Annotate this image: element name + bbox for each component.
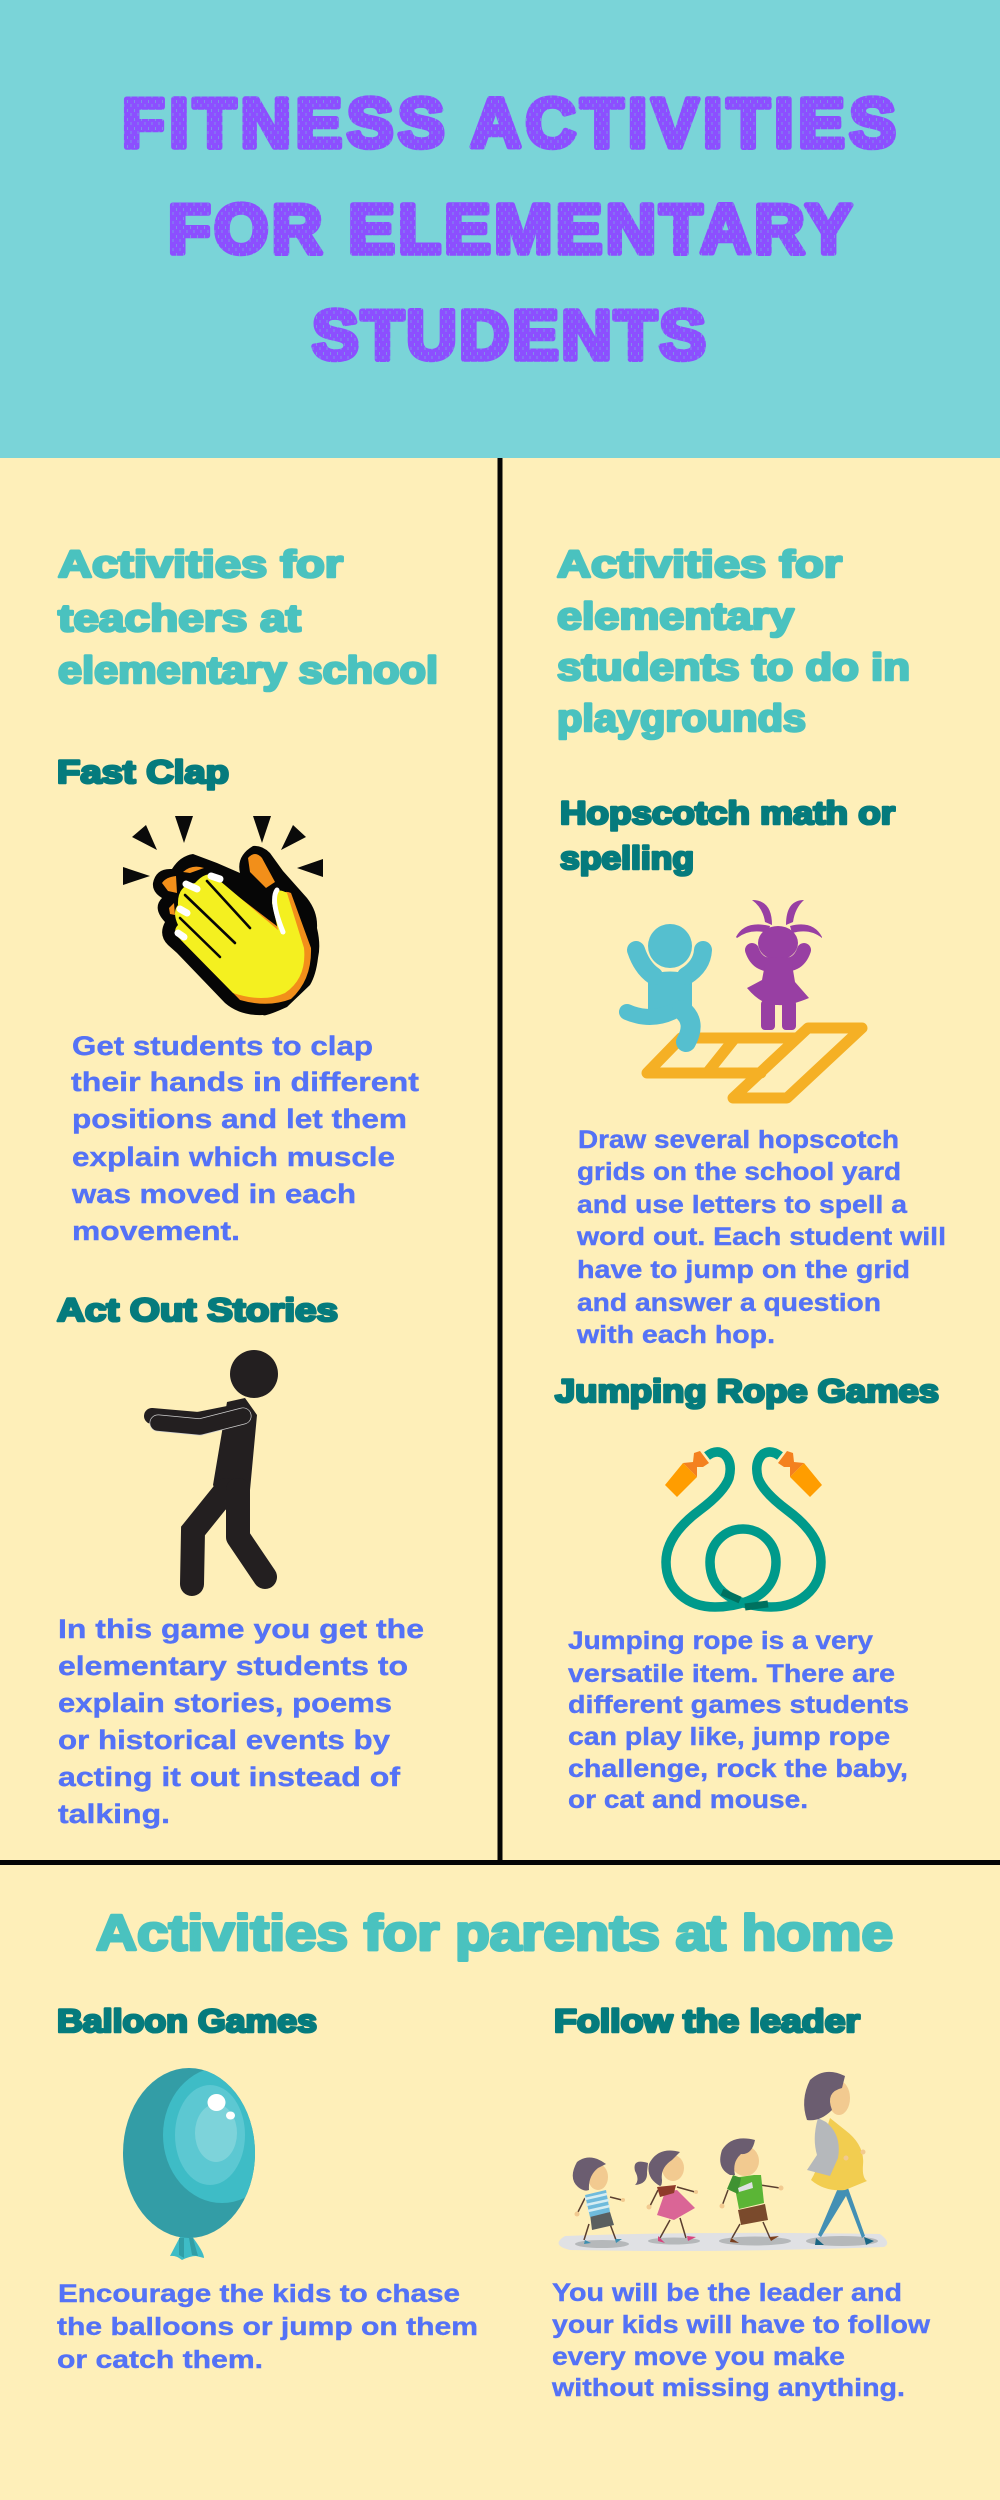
text: Balloon description — [57, 2280, 478, 2374]
text: Jumping Rope description: versatile item. There are — [568, 1660, 895, 1688]
subheading: Fast Clap: Fast Clap — [57, 754, 229, 790]
figure: boy in green shirt — [720, 2138, 784, 2243]
illustration: mother leading children — [559, 2072, 887, 2251]
title: STUDENTS — [312, 296, 706, 374]
text: Jumping Rope description — [568, 1627, 909, 1814]
text: Act Out Stories description: In this game you get the — [58, 1614, 424, 1644]
text: Hopscotch description: have to jump on the grid — [577, 1256, 910, 1284]
text: Hopscotch description: Draw several hopscotch — [578, 1126, 899, 1154]
text: Act Out Stories description — [58, 1614, 424, 1829]
text: Fast Clap description: Get students to clap — [72, 1031, 373, 1061]
heading: students: Activities for — [557, 544, 842, 586]
panel: activities for parents — [57, 1905, 931, 2402]
icon: kids on hopscotch — [627, 900, 862, 1098]
text: Act Out Stories description: explain stories, poems — [58, 1688, 392, 1718]
text: Jumping Rope description: Jumping rope is a very — [568, 1627, 873, 1655]
text: Act Out Stories description: acting it out instead of — [58, 1762, 401, 1792]
subheading: Hopscotch — [560, 795, 895, 876]
heading: parents: Activities for parents at home — [96, 1905, 893, 1961]
title — [122, 84, 896, 374]
text: Jumping Rope description: challenge, rock the baby, — [568, 1755, 908, 1783]
text: Fast Clap description — [71, 1031, 419, 1246]
figure: child in striped shirt — [573, 2157, 625, 2244]
text: Hopscotch description — [576, 1126, 946, 1349]
text: Jumping Rope description: different games students — [568, 1691, 909, 1719]
figure: girl in pink dress — [635, 2150, 698, 2243]
text: Fast Clap description: movement. — [72, 1216, 240, 1246]
heading: teachers: Activities for — [58, 544, 343, 586]
icon: acting stick figure — [152, 1350, 278, 1584]
text: Act Out Stories description: elementary students to — [58, 1651, 408, 1681]
icon: jump rope — [665, 1451, 822, 1607]
text: Follow the leader description: every move you make — [552, 2343, 845, 2371]
panel: activities for students — [555, 544, 946, 1814]
panel: activities for teachers — [57, 544, 438, 1829]
heading: teachers: elementary school — [58, 650, 438, 692]
figure: mother in yellow dress — [804, 2072, 874, 2245]
text: Follow the leader description: without missing anything. — [551, 2374, 905, 2402]
text: Follow the leader description: your kids will have to follow — [552, 2311, 931, 2339]
text: Fast Clap description: explain which muscle — [72, 1142, 395, 1172]
heading: students — [557, 544, 910, 740]
text: Fast Clap description: positions and let them — [72, 1104, 407, 1134]
text: Balloon description: or catch them. — [57, 2346, 263, 2374]
icon: balloon — [123, 2068, 255, 2260]
text: Balloon description: the balloons or jump on them — [57, 2313, 478, 2341]
header band — [0, 0, 1000, 458]
text: Hopscotch description: and answer a question — [577, 1289, 881, 1317]
subheading: Follow the leader: Follow the leader — [554, 2003, 860, 2039]
heading: students: playgrounds — [557, 698, 806, 740]
heading: students: students to do in — [557, 647, 910, 689]
heading: students: elementary — [557, 596, 794, 638]
text: Fast Clap description: was moved in each — [71, 1179, 356, 1209]
subheading: Hopscotch: spelling — [560, 840, 694, 876]
text: Jumping Rope description: can play like, jump rope — [568, 1723, 890, 1751]
title: FOR ELEMENTARY — [168, 190, 852, 268]
text: Hopscotch description: word out. Each student will — [576, 1223, 946, 1251]
text: Act Out Stories description: or historical events by — [58, 1725, 390, 1755]
heading: teachers: teachers at — [58, 598, 301, 640]
subheading: Hopscotch: Hopscotch math or — [560, 795, 895, 831]
subheading: Act Out Stories: Act Out Stories — [57, 1292, 338, 1328]
heading: teachers — [58, 544, 438, 692]
text: Follow the leader description — [551, 2279, 931, 2402]
title: FITNESS ACTIVITIES — [122, 84, 896, 162]
text: Hopscotch description: with each hop. — [576, 1321, 775, 1349]
text: Hopscotch description: grids on the school yard — [577, 1158, 901, 1186]
text: Fast Clap description: their hands in different — [71, 1067, 419, 1097]
text: Follow the leader description: You will be the leader and — [552, 2279, 902, 2307]
subheading: Balloon Games: Balloon Games — [57, 2003, 317, 2039]
text: Balloon description: Encourage the kids to chase — [58, 2280, 460, 2308]
text: Hopscotch description: and use letters to spell a — [577, 1191, 908, 1219]
subheading: Jumping Rope Games: Jumping Rope Games — [555, 1373, 939, 1409]
text: Act Out Stories description: talking. — [58, 1799, 170, 1829]
text: Jumping Rope description: or cat and mouse. — [568, 1786, 808, 1814]
icon: clapping hands — [123, 816, 323, 1015]
